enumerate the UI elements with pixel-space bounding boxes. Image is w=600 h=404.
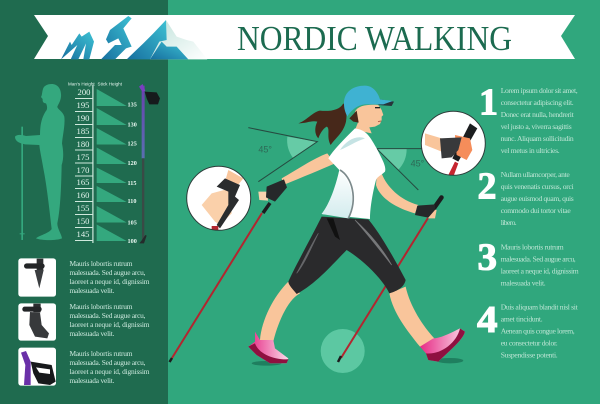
step 3: Mauris lobortis rutrum <box>501 242 564 252</box>
back arm and glove <box>258 153 335 202</box>
man height scale: 190 <box>77 113 89 123</box>
baseball cap <box>344 86 394 117</box>
step 3: 3 <box>478 236 497 278</box>
text: boot description: malesuada. Sed augue arcu, <box>70 311 146 320</box>
ground contact circle <box>321 329 365 373</box>
step 1: vel metus in ultricies. <box>501 146 560 155</box>
stick height scale triangles: 120 <box>128 160 137 167</box>
height chart <box>15 82 160 245</box>
front arm and glove <box>376 173 437 218</box>
front leg and shoe <box>389 287 465 363</box>
man height scale: 185 <box>77 126 89 136</box>
angle diagram: front arm 45 degrees <box>377 149 425 190</box>
back leg and shoe <box>248 282 300 366</box>
stick height scale triangles: 115 <box>128 180 136 187</box>
man height scale <box>75 85 94 243</box>
step 4: 4 <box>477 299 498 341</box>
text: strap description: malesuada velit. <box>70 376 115 385</box>
step 4: Duis aliquam blandit nisl sit <box>501 302 579 312</box>
step 2: augue euismod quam, quis <box>501 194 574 203</box>
step 2: quis venenatis cursus, orci <box>501 182 574 191</box>
step 4: eu consectetur dolor. <box>501 338 558 348</box>
step 1: Donec erat nulla, hendrerit <box>501 110 575 119</box>
man height scale: 160 <box>77 190 89 200</box>
stick height scale triangles: 135 <box>128 102 137 108</box>
text: boot description <box>70 302 150 338</box>
icon: person silhouette with pole <box>15 84 65 240</box>
front walking pole <box>338 198 442 362</box>
step 2: Nullam ullamcorper, ante <box>501 170 570 179</box>
chart headers: Stick Height <box>98 82 123 86</box>
hair ponytail <box>298 103 347 145</box>
panel: pole tip items <box>18 258 150 386</box>
capri pants <box>288 217 406 294</box>
icon: walking pole <box>139 84 160 243</box>
stick height scale triangles: 130 <box>128 122 137 128</box>
step 4: amet tincidunt. <box>501 314 543 324</box>
callout: glove detail wrist <box>187 166 251 231</box>
man height scale: 195 <box>77 100 89 110</box>
step 1: consectetur adipiscing elit. <box>501 98 574 107</box>
man height scale: 175 <box>77 152 89 162</box>
step 4 <box>477 299 579 360</box>
step 4: Aenean quis congue lorem, <box>501 326 575 336</box>
angle diagram: back arm 45 degrees: 45° <box>258 144 272 154</box>
text: spike description <box>70 259 150 295</box>
text: spike description: laoreet a neque id, dignissim <box>70 277 150 286</box>
text: strap description: malesuada. Sed augue arcu, <box>70 358 146 367</box>
text: spike description: malesuada velit. <box>70 286 115 295</box>
chart headers <box>68 82 123 86</box>
figure: nordic walker <box>170 86 465 366</box>
title: NORDIC WALKING <box>237 19 512 58</box>
icon: pole spike <box>18 258 56 297</box>
man height scale: 200 <box>78 87 90 97</box>
text: spike description: malesuada. Sed augue arcu, <box>70 268 146 277</box>
stick height scale triangles <box>97 89 137 245</box>
text: boot description: laoreet a neque id, dignissim <box>70 320 150 329</box>
step 3 <box>478 236 579 288</box>
back walking pole <box>170 203 270 362</box>
step 1 <box>479 82 578 155</box>
text: strap description: Mauris lobortis rutrum <box>70 349 133 358</box>
panel: left sidebar <box>0 0 168 404</box>
text: boot description: malesuada velit. <box>70 329 115 338</box>
step 1: vel justo a, viverra sagittis <box>501 122 572 131</box>
man height scale: 150 <box>77 216 89 226</box>
stick height scale triangles: 125 <box>128 140 137 148</box>
step 1: Lorem ipsum dolor sit amet, <box>501 86 578 95</box>
step 2: libero. <box>501 218 517 227</box>
text: spike description: Mauris lobortis rutrum <box>70 259 133 268</box>
icon: mountains <box>61 16 207 59</box>
step 2: commodo dui tortor vitae <box>501 206 571 215</box>
step 3: malesuada velit. <box>501 278 546 288</box>
stick height scale triangles: 100 <box>128 238 137 245</box>
icon: rubber boot tip <box>18 303 56 341</box>
step 3: laoreet a neque id, dignissim <box>501 266 579 276</box>
hair near ear <box>349 111 359 123</box>
text: boot description: Mauris lobortis rutrum <box>70 302 133 311</box>
man height scale: 155 <box>77 203 89 213</box>
man height scale: 165 <box>77 177 89 187</box>
step 1: nunc. Aliquam sollicitudin <box>501 134 574 143</box>
angle diagram: front arm 45 degrees: 45° <box>411 158 425 168</box>
man height scale: 145 <box>77 229 89 239</box>
callout: glove detail handle <box>421 111 485 177</box>
text: strap description <box>70 349 150 385</box>
angle diagram: back arm 45 degrees <box>248 128 317 182</box>
stick height scale triangles: 110 <box>128 198 136 205</box>
stick height scale triangles: 105 <box>128 220 137 226</box>
chart headers: Man's Height <box>68 82 95 86</box>
step 4: Suspendisse potenti. <box>501 350 558 360</box>
step 2: 2 <box>478 166 496 208</box>
icon: handle strap <box>18 348 56 386</box>
text: strap description: laoreet a neque id, dignissim <box>70 367 150 376</box>
man height scale: 180 <box>77 139 89 149</box>
head and neck <box>355 105 383 133</box>
man height scale: 170 <box>77 165 89 175</box>
t-shirt <box>322 128 385 219</box>
step 3: malesuada. Sed augue arcu, <box>501 254 576 264</box>
step 2 <box>478 166 574 227</box>
step 1: 1 <box>479 82 498 124</box>
title banner ribbon <box>34 15 575 59</box>
